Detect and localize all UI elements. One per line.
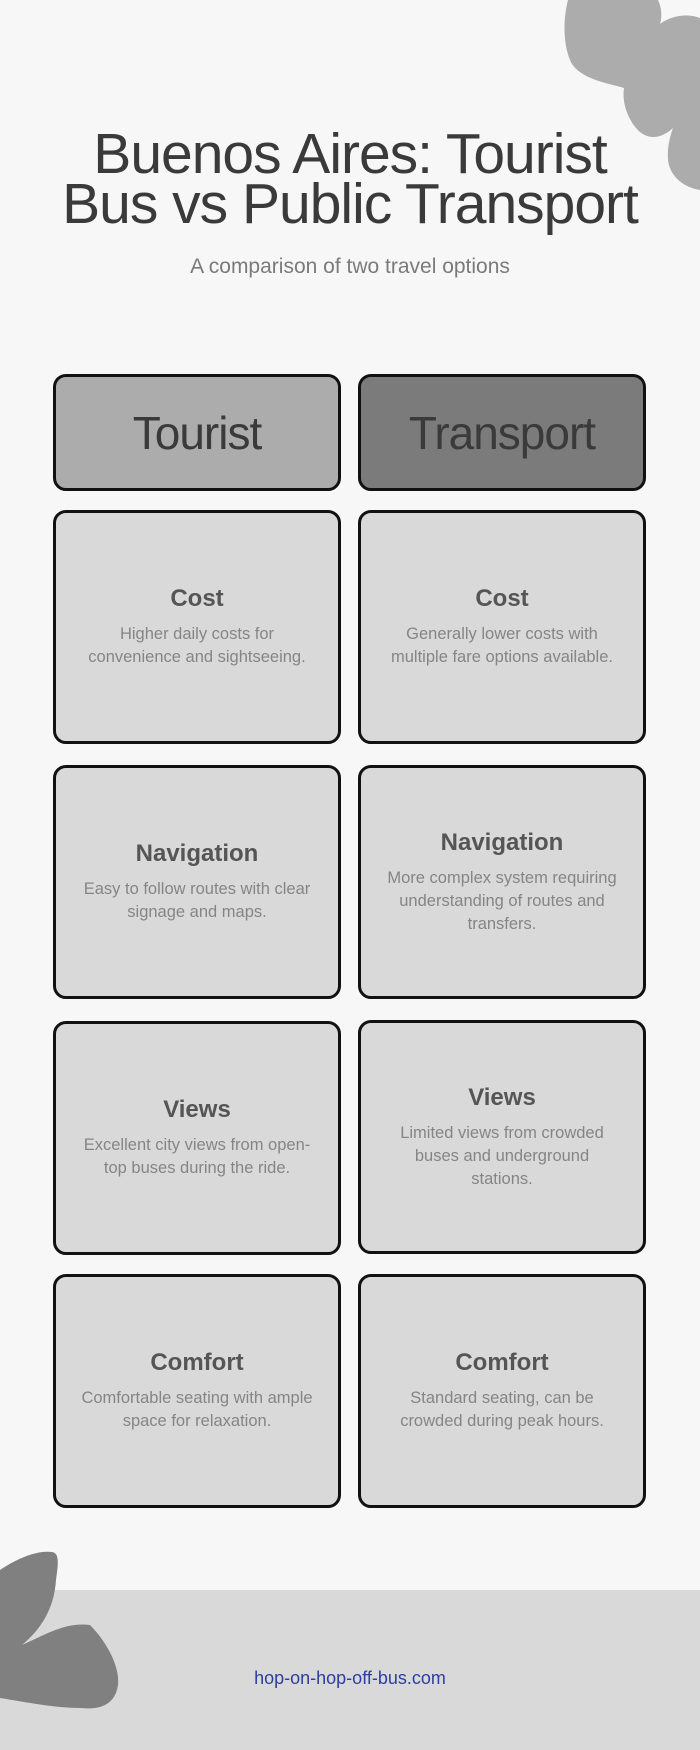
card: tourist comfort <box>53 1274 341 1508</box>
card: transport cost: Generally lower costs with multiple fare options available. <box>391 625 613 666</box>
card: transport comfort: Comfort <box>455 1349 549 1376</box>
card: transport views <box>358 1020 646 1254</box>
card: tourist comfort: Comfortable seating with ample space for relaxation. <box>81 1389 313 1430</box>
card: tourist views: Excellent city views from open-top buses during the ride. <box>84 1136 310 1177</box>
card: tourist navigation: Navigation <box>136 840 258 867</box>
card: transport comfort: Standard seating, can be crowded during peak hours. <box>400 1389 604 1430</box>
card: transport navigation <box>358 765 646 999</box>
header: Transport: Transport <box>409 406 595 458</box>
card: tourist cost <box>53 510 341 744</box>
header: Tourist <box>53 374 341 491</box>
card: tourist cost: Higher daily costs for convenience and sightseeing. <box>88 625 306 666</box>
card: transport navigation: More complex system requiring understanding of routes and transfers. <box>387 868 617 932</box>
header: Tourist: Tourist <box>133 406 261 458</box>
footer band <box>0 1590 700 1750</box>
card: transport cost <box>358 510 646 744</box>
card: tourist navigation: Easy to follow routes with clear signage and maps. <box>84 880 310 921</box>
card: transport comfort <box>358 1274 646 1508</box>
decorative blob top-right <box>564 0 700 190</box>
title: Bus vs Public Transport <box>62 172 638 236</box>
card: transport cost: Cost <box>475 585 529 612</box>
footer link: hop-on-hop-off-bus.com <box>254 1668 446 1688</box>
card: tourist views <box>53 1021 341 1255</box>
card: tourist comfort: Comfort <box>150 1349 244 1376</box>
card: transport views: Limited views from crowded buses and underground stations. <box>400 1124 604 1188</box>
header: Transport <box>358 374 646 491</box>
card: transport navigation: Navigation <box>441 828 563 856</box>
decorative blob bottom-left <box>0 1552 118 1708</box>
title <box>62 122 638 236</box>
title: Buenos Aires: Tourist <box>93 122 607 186</box>
card: tourist cost: Cost <box>170 585 224 612</box>
card: tourist views: Views <box>163 1096 231 1123</box>
card: tourist navigation <box>53 765 341 999</box>
subtitle: A comparison of two travel options <box>190 255 510 278</box>
card: transport views: Views <box>468 1084 536 1110</box>
